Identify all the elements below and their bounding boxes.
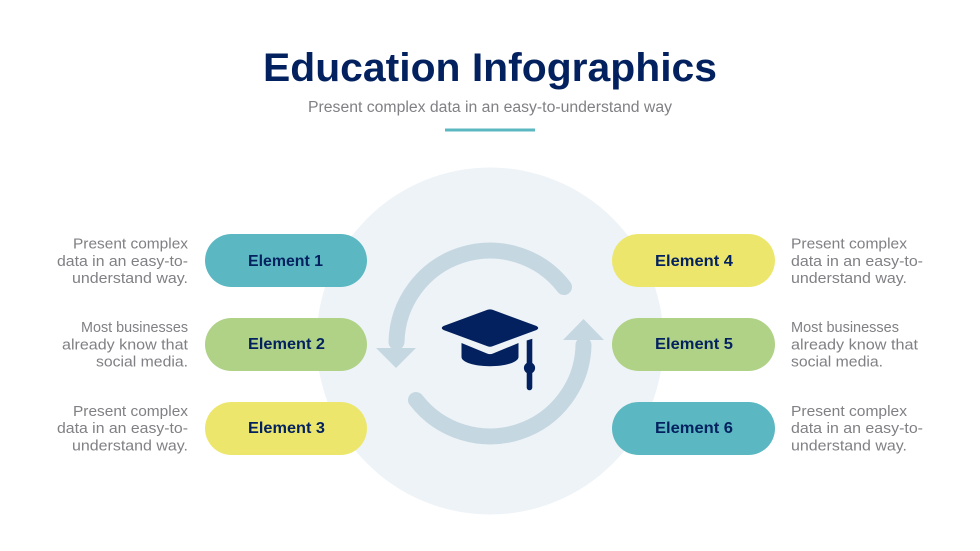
pill: Element 4 bbox=[612, 234, 775, 287]
text block: left 2 bbox=[62, 319, 189, 370]
pill: Element 1: Element 1 bbox=[248, 253, 323, 270]
title underline bbox=[445, 128, 535, 132]
subtitle: Present complex data in an easy-to-understand way bbox=[308, 99, 672, 116]
pill: Element 4: Element 4 bbox=[655, 253, 733, 270]
text block: right 2: social media. bbox=[791, 354, 883, 370]
text block: left 3: understand way. bbox=[72, 438, 188, 454]
text block: left 2: already know that bbox=[62, 336, 189, 354]
pill: Element 3 bbox=[205, 402, 367, 455]
text block: right 3 bbox=[791, 403, 923, 454]
icon: graduation cap bbox=[442, 309, 538, 390]
text block: right 1: Present complex bbox=[791, 236, 908, 252]
title: Education Infographics bbox=[263, 46, 717, 90]
background circle bbox=[316, 168, 664, 514]
arrow: bottom arc pointing right-up bbox=[416, 319, 604, 436]
cycle arrows bbox=[376, 251, 604, 436]
text block: left 1 bbox=[57, 236, 189, 287]
text block: left 2: social media. bbox=[96, 354, 188, 370]
text block: left 2: Most businesses bbox=[81, 319, 188, 336]
pill: Element 3: Element 3 bbox=[248, 420, 325, 437]
text block: right 1: data in an easy-to- bbox=[791, 253, 923, 270]
text block: right 1 bbox=[791, 236, 923, 287]
text block: left 1: Present complex bbox=[73, 236, 189, 252]
text block: right 1: understand way. bbox=[791, 270, 907, 287]
text block: right 3: understand way. bbox=[791, 438, 907, 454]
text block: right 3: Present complex bbox=[791, 403, 908, 420]
pill: Element 1 bbox=[205, 234, 367, 287]
text block: right 3: data in an easy-to- bbox=[791, 420, 923, 437]
pill: Element 6: Element 6 bbox=[655, 420, 733, 437]
pill: Element 5 bbox=[612, 318, 775, 371]
text block: left 1: understand way. bbox=[72, 270, 188, 287]
header bbox=[263, 46, 717, 132]
pill: Element 5: Element 5 bbox=[655, 336, 733, 353]
text block: right 2 bbox=[791, 319, 919, 370]
arrow: top arc pointing left-down bbox=[376, 251, 564, 368]
pill: Element 6 bbox=[612, 402, 775, 455]
pill: Element 2 bbox=[205, 318, 367, 371]
text block: right 2: Most businesses bbox=[791, 319, 899, 336]
text block: left 3: data in an easy-to- bbox=[57, 420, 188, 437]
pill: Element 2: Element 2 bbox=[248, 336, 325, 353]
text block: right 2: already know that bbox=[791, 336, 919, 354]
text block: left 3: Present complex bbox=[73, 403, 189, 420]
text block: left 1: data in an easy-to- bbox=[57, 253, 188, 270]
text block: left 3 bbox=[57, 403, 189, 454]
